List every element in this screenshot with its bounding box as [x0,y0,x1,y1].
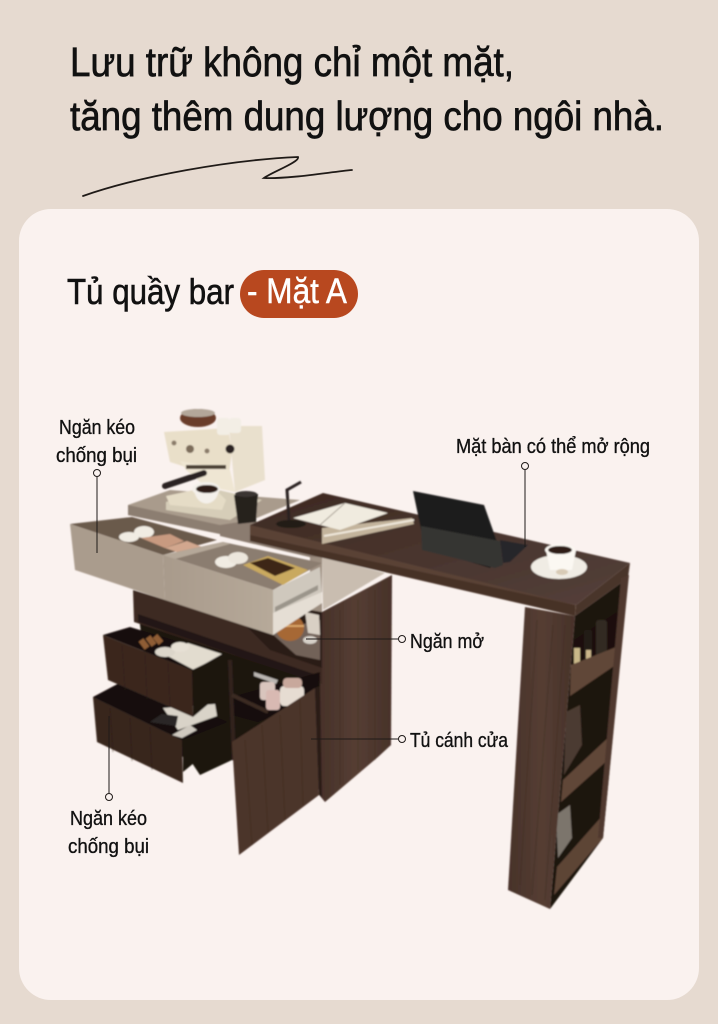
lower black drawer [93,680,228,783]
bar shelf unit [550,575,629,909]
callout: upper drawer: chống bụi [56,444,137,467]
callout: expandable table top: Mặt bàn có thể mở rộng [456,435,650,458]
open shelf niche [230,610,322,668]
callout: door cabinet: Tủ cánh cửa [410,729,508,752]
coffee machine [164,409,265,524]
callout: expandable table top [456,435,650,547]
furniture: bar cabinet [70,409,630,909]
callout: door cabinet [311,729,508,752]
upper black drawer [103,627,225,717]
main panel [19,209,699,1000]
cabinet interior [138,610,320,790]
callout: lower drawer [68,716,149,858]
taupe counter top [128,490,300,534]
title: Lưu trữ không chỉ một mặt, [70,39,514,85]
books [293,503,414,544]
figurine [276,482,306,528]
bar leg front [508,607,575,909]
callout: open shelf: Ngăn mở [410,630,484,653]
title [70,39,664,139]
callout: upper drawer: Ngăn kéo [59,416,135,439]
callout: lower drawer: chống bụi [68,835,149,858]
callout: open shelf [306,630,484,653]
coffee cup and saucer [531,544,587,579]
cabinet side [320,575,392,802]
right drawer [163,542,322,635]
cups on shelf [228,660,320,760]
panel heading: Tủ quầy bar [67,271,234,312]
callout: lower drawer: Ngăn kéo [70,807,147,830]
left drawer [70,517,217,600]
right inner panel [322,557,385,610]
panel heading [67,270,358,318]
bar table top [250,493,630,616]
door [232,688,319,855]
heading pill: - Mặt A [247,272,348,311]
squiggle underline [83,157,352,196]
tablet [413,491,528,568]
title: tăng thêm dung lượng cho ngôi nhà. [70,93,664,139]
callout: upper drawer [56,416,137,553]
cabinet top beam [133,590,322,684]
